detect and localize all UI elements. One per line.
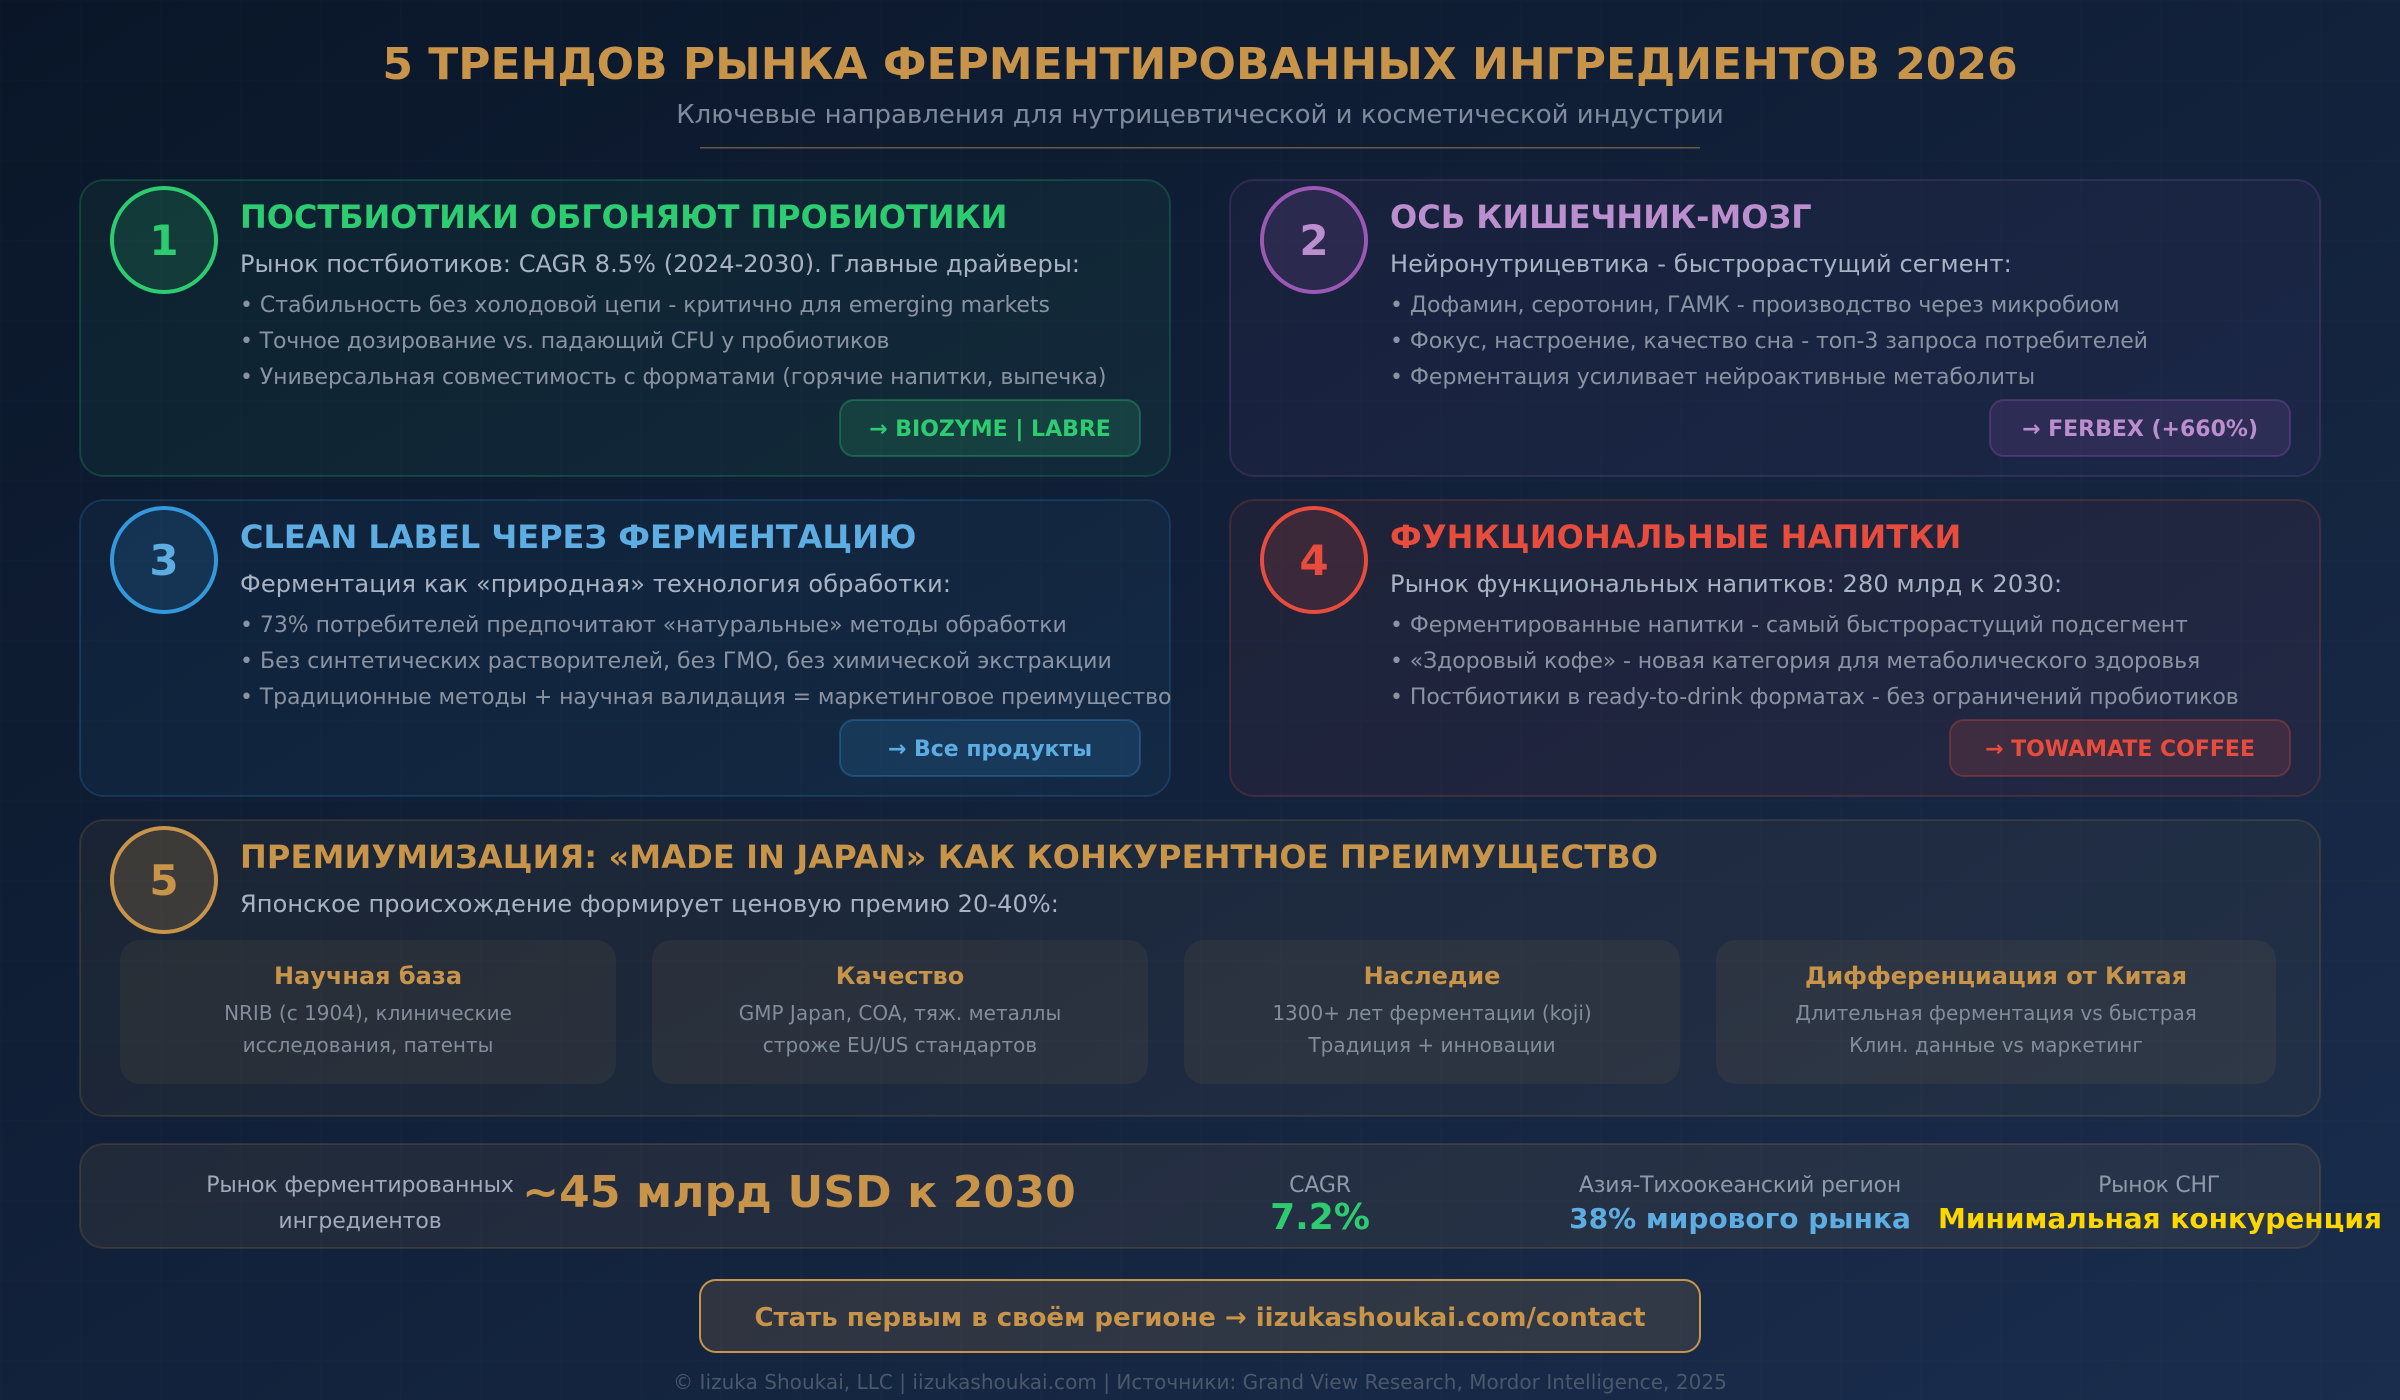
stat: Asia-Pacific <box>1569 1173 1911 1234</box>
intro 4: Рынок функциональных напитков: 280 млрд к 2030: <box>1390 570 2062 598</box>
badge 4: 4 <box>1299 536 1329 584</box>
tag 2 <box>1990 400 2290 456</box>
sub-card: differentiation: Длительная ферментация vs быстрая <box>1795 1001 2197 1025</box>
panel: trend 5 premiumization <box>80 820 2320 1116</box>
badge 4 <box>1260 506 1368 614</box>
bullet 1.1: • Стабильность без холодовой цепи - критично для emerging markets <box>240 293 1050 318</box>
sub-card: differentiation: Клин. данные vs маркетинг <box>1849 1033 2143 1057</box>
stat: Asia-Pacific: Азия-Тихоокеанский регион <box>1579 1173 1901 1198</box>
panel: trend 2 gut-brain axis <box>1230 180 2320 476</box>
bullet 1.3: • Универсальная совместимость с форматами (горячие напитки, выпечка) <box>240 365 1106 390</box>
stat: Asia-Pacific: 38% мирового рынка <box>1569 1202 1911 1234</box>
badge 3 <box>110 506 218 614</box>
call to action button: Стать первым в своём регионе → iizukashoukai.com/contact <box>754 1303 1646 1333</box>
stat: market size label <box>206 1173 514 1234</box>
stat: CIS market: Минимальная конкуренция <box>1938 1202 2382 1234</box>
stat: market size value: ~45 млрд USD к 2030 <box>522 1166 1076 1218</box>
intro 3: Ферментация как «природная» технология обработки: <box>240 570 951 598</box>
tag 1: → BIOZYME | LABRE <box>869 417 1111 442</box>
sub-card: differentiation <box>1716 940 2276 1084</box>
bullet 2.3: • Ферментация усиливает нейроактивные метаболиты <box>1390 365 2035 390</box>
sub-card: quality <box>652 940 1148 1084</box>
tag 2: → FERBEX (+660%) <box>2022 417 2258 442</box>
title: 5 ТРЕНДОВ РЫНКА ФЕРМЕНТИРОВАННЫХ ИНГРЕДИЕНТОВ 2026 <box>382 38 2018 90</box>
bullet 2.1: • Дофамин, серотонин, ГАМК - производство через микробиом <box>1390 293 2120 318</box>
bullet 4.2: • «Здоровый кофе» - новая категория для метаболического здоровья <box>1390 649 2200 674</box>
stat: CAGR: 7.2% <box>1270 1196 1370 1238</box>
bullet 3.2: • Без синтетических растворителей, без ГМО, без химической экстракции <box>240 649 1112 674</box>
sub-card: heritage: Традиция + инновации <box>1308 1033 1556 1057</box>
sub-card: science <box>120 940 616 1084</box>
badge 1 <box>110 186 218 294</box>
badge 1: 1 <box>149 216 179 264</box>
call to action button <box>700 1280 1700 1352</box>
bullet 3.1: • 73% потребителей предпочитают «натуральные» методы обработки <box>240 613 1067 638</box>
sub-card: heritage: 1300+ лет ферментации (koji) <box>1272 1001 1592 1025</box>
stat: CAGR <box>1270 1173 1370 1238</box>
stat: CIS market: Рынок СНГ <box>2098 1173 2220 1198</box>
heading 4: ФУНКЦИОНАЛЬНЫЕ НАПИТКИ <box>1390 518 1961 556</box>
panel: market stats <box>80 1144 2320 1248</box>
heading 5: ПРЕМИУМИЗАЦИЯ: «MADE IN JAPAN» КАК КОНКУРЕНТНОЕ ПРЕИМУЩЕСТВО <box>240 838 1658 876</box>
panel: trend 1 postbiotics <box>80 180 1170 476</box>
sub-card: science: NRIB (с 1904), клинические <box>224 1001 512 1025</box>
intro 1: Рынок постбиотиков: CAGR 8.5% (2024-2030). Главные драйверы: <box>240 250 1080 278</box>
bullet 4.3: • Постбиотики в ready-to-drink форматах - без ограничений пробиотиков <box>1390 685 2239 710</box>
sub-card: quality: Качество <box>836 962 964 990</box>
tag 3 <box>840 720 1140 776</box>
sub-card: science: исследования, патенты <box>243 1033 493 1057</box>
sub-card: heritage: Наследие <box>1364 962 1500 990</box>
stat: CAGR: CAGR <box>1289 1173 1351 1198</box>
subtitle: Ключевые направления для нутрицевтической и косметической индустрии <box>676 100 1724 130</box>
sub-card: quality: GMP Japan, COA, тяж. металлы <box>739 1001 1061 1025</box>
footer: © Iizuka Shoukai, LLC | iizukashoukai.com | Источники: Grand View Research, Mordor Intelligence, 2025 <box>673 1370 1727 1394</box>
bullet 3.3: • Традиционные методы + научная валидация = маркетинговое преимущество <box>240 685 1171 710</box>
stat: market size label: Рынок ферментированных <box>206 1173 514 1198</box>
sub-card: quality: строже EU/US стандартов <box>763 1033 1037 1057</box>
sub-card: science: Научная база <box>274 962 462 990</box>
bullet 4.1: • Ферментированные напитки - самый быстрорастущий подсегмент <box>1390 613 2188 638</box>
bullet 2.2: • Фокус, настроение, качество сна - топ-3 запроса потребителей <box>1390 329 2148 354</box>
tag 3: → Все продукты <box>888 737 1092 762</box>
badge 2 <box>1260 186 1368 294</box>
tag 1 <box>840 400 1140 456</box>
heading 1: ПОСТБИОТИКИ ОБГОНЯЮТ ПРОБИОТИКИ <box>240 198 1007 236</box>
badge 3: 3 <box>149 536 179 584</box>
sub-card: differentiation: Дифференциация от Китая <box>1805 962 2187 990</box>
bullet 1.2: • Точное дозирование vs. падающий CFU у пробиотиков <box>240 329 889 354</box>
intro 5: Японское происхождение формирует ценовую премию 20-40%: <box>240 890 1059 918</box>
badge 2: 2 <box>1299 216 1329 264</box>
intro 2: Нейронутрицевтика - быстрорастущий сегмент: <box>1390 250 2012 278</box>
badge 5 <box>110 826 218 934</box>
stat: CIS market <box>1938 1173 2382 1234</box>
badge 5: 5 <box>149 856 179 904</box>
tag 4 <box>1950 720 2290 776</box>
stat: market size label: ингредиентов <box>278 1209 442 1234</box>
panel: trend 3 clean label <box>80 500 1170 796</box>
heading 3: CLEAN LABEL ЧЕРЕЗ ФЕРМЕНТАЦИЮ <box>240 518 916 556</box>
heading 2: ОСЬ КИШЕЧНИК-МОЗГ <box>1390 198 1812 236</box>
sub-card: heritage <box>1184 940 1680 1084</box>
panel: trend 4 functional drinks <box>1230 500 2320 796</box>
tag 4: → TOWAMATE COFFEE <box>1985 737 2255 762</box>
